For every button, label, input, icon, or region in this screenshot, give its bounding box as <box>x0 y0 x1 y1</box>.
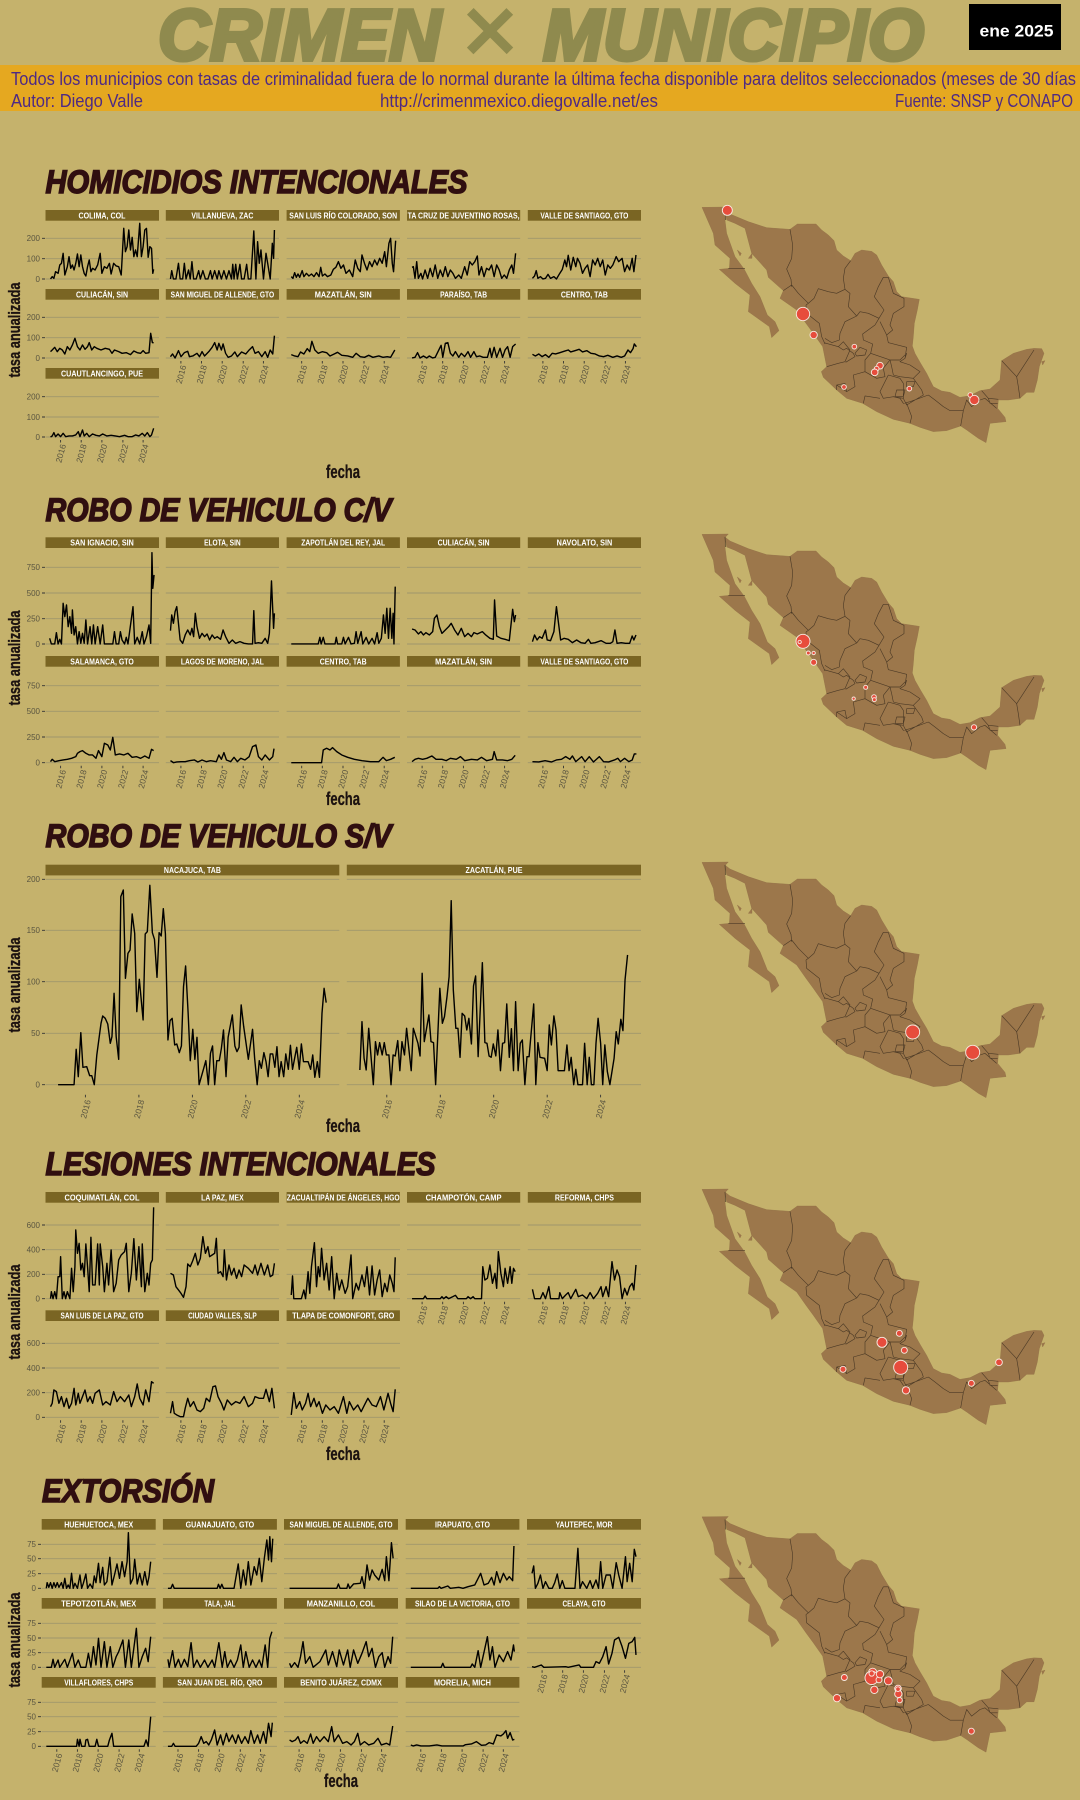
panel: Lagos de Moreno: 2022 <box>236 768 251 789</box>
panel: Centro: 2020 <box>336 768 350 789</box>
y ticks: 500 <box>27 707 41 716</box>
panel: Tlapa de Comonfort: 2024 <box>377 1423 392 1444</box>
y ticks: 25 <box>27 1570 37 1578</box>
panel: Zacualtipán de Ángeles: ZACUALTIPÁN DE ÁNGELES, HGO <box>287 1192 400 1202</box>
y ticks: 0 <box>36 354 41 363</box>
y ticks: 750 <box>27 682 41 690</box>
panel: Benito Juárez: 2018 <box>313 1752 327 1773</box>
panel: Villaflores: 2022 <box>112 1752 127 1773</box>
y ticks: 100 <box>27 413 41 422</box>
panel: Culiacán: CULIACÁN, SIN <box>438 538 490 548</box>
subtitle band: Autor: Diego Valle <box>11 91 143 111</box>
panel: Manzanillo <box>284 1598 398 1667</box>
panel: Centro: 2018 <box>556 364 571 385</box>
y ticks: 200 <box>27 1388 41 1398</box>
panel: Morelia: 2018 <box>434 1752 449 1773</box>
panel: San Juan del Río: SAN JUAN DEL RÍO, QRO <box>177 1677 263 1687</box>
panel: Mazatlán: 2024 <box>497 768 512 789</box>
y ticks <box>27 1221 45 1422</box>
section: robo de vehiculo c/v <box>5 492 1045 809</box>
y ticks: 100 <box>27 978 41 986</box>
panel: Navolato: NAVOLATO, SIN <box>557 538 612 548</box>
y ticks: 25 <box>27 1728 37 1736</box>
panel: Centro: CENTRO, TAB <box>561 289 608 299</box>
panel: Champotón: 2018 <box>436 1304 450 1325</box>
panel: Ciudad Valles: 2024 <box>256 1423 271 1444</box>
heading: EXTORSIÓN <box>42 1473 215 1509</box>
panel: Mazatlán: 2020 <box>336 364 350 385</box>
panel: Centro: 2022 <box>598 364 613 385</box>
panel: Navolato <box>528 537 641 644</box>
panel: Tepotzotlán: TEPOTZOTLÁN, MEX <box>61 1598 136 1608</box>
panel: San Miguel de Allende <box>284 1519 398 1588</box>
panel: Villaflores: 2016 <box>50 1752 64 1773</box>
panel: Paraíso: PARAÍSO, TAB <box>440 289 487 299</box>
y ticks: 0 <box>36 1413 41 1422</box>
panel: Mazatlán: 2018 <box>315 364 330 385</box>
panel: Paraíso: 2016 <box>415 364 430 385</box>
panel: Cuautlancingo: 2022 <box>116 443 130 464</box>
panel: Villaflores: 2024 <box>132 1752 147 1773</box>
panel: Centro: 2024 <box>618 364 633 385</box>
y ticks: 75 <box>27 1698 37 1707</box>
panel: Colima: COLIMA, COL <box>78 210 126 220</box>
panel: Reforma: 2022 <box>598 1304 613 1325</box>
y ticks: 0 <box>32 1584 37 1593</box>
panel: Santa Cruz de Juventino Rosas <box>407 210 520 279</box>
panel: San Ignacio <box>46 537 159 644</box>
y ticks: 750 <box>27 563 41 572</box>
panel: Zacatlán: ZACATLÁN, PUE <box>466 865 523 875</box>
y ticks <box>27 234 45 442</box>
y ticks: 400 <box>27 1246 41 1254</box>
panel: Reforma: REFORMA, CHPS <box>555 1192 614 1202</box>
panel: Ciudad Valles <box>166 1310 279 1444</box>
panel: Zacatlán <box>347 865 641 1119</box>
panel: Celaya: 2024 <box>617 1673 632 1694</box>
date badge <box>969 4 1061 50</box>
panel: San Luis de la Paz: 2024 <box>136 1423 151 1444</box>
y ticks: 0 <box>36 1294 41 1304</box>
panel: San Miguel de Allende: 2020 <box>215 364 230 385</box>
y ticks: 0 <box>36 275 41 284</box>
y ticks: 200 <box>27 1270 41 1279</box>
panel: Morelia: 2020 <box>455 1752 470 1773</box>
panel: Salamanca: 2018 <box>74 768 89 789</box>
panel: Silao de la Victoria <box>406 1598 519 1667</box>
panel: Salamanca: 2016 <box>53 768 68 789</box>
x axis title: fecha <box>326 1116 361 1136</box>
panel: Centro: CENTRO, TAB <box>320 656 367 666</box>
panel: Villanueva <box>166 210 279 279</box>
panel: San Luis de la Paz: 2022 <box>116 1423 130 1444</box>
panel: Santa Cruz de Juventino Rosas: TA CRUZ DE JUVENTINO ROSAS, <box>408 210 520 220</box>
y axis title: tasa anualizada <box>5 1264 24 1360</box>
panel: Culiacán <box>46 289 159 358</box>
panel: Centro <box>528 289 641 385</box>
panel: Benito Juárez: 2022 <box>354 1752 369 1773</box>
x axis title: fecha <box>326 462 361 482</box>
map: lesiones <box>702 1189 1045 1425</box>
panel: Morelia: 2024 <box>496 1752 511 1773</box>
panel: Nacajuca: 2022 <box>239 1098 253 1119</box>
panel: Valle de Santiago: 2024 <box>618 768 633 789</box>
y ticks: 25 <box>27 1648 37 1658</box>
panel: San Luis Río Colorado: SAN LUIS RÍO COLORADO, SON <box>289 210 397 220</box>
y ticks: 0 <box>36 758 41 768</box>
panel: Reforma: 2024 <box>618 1304 633 1325</box>
map: extorsión <box>702 1516 1045 1752</box>
panel: Benito Juárez: BENITO JUÁREZ, CDMX <box>300 1677 382 1687</box>
panel: Villaflores: VILLAFLORES, CHPS <box>64 1677 133 1687</box>
panel: Valle de Santiago: 2020 <box>577 768 592 789</box>
panel: Cuautlancingo: 2024 <box>136 443 151 464</box>
panel: Nacajuca <box>46 865 339 1119</box>
panel: Benito Juárez: 2024 <box>374 1752 389 1773</box>
panel: San Miguel de Allende: SAN MIGUEL DE ALLENDE, GTO <box>171 289 274 299</box>
panel: Morelia <box>406 1677 519 1773</box>
panel: Villaflores: 2020 <box>91 1752 106 1773</box>
panel: Morelia: 2016 <box>414 1752 428 1773</box>
panel: Coquimatlán <box>46 1192 159 1299</box>
y axis title: tasa anualizada <box>5 1592 24 1688</box>
section: robo de vehiculo s/v <box>5 818 1045 1136</box>
y axis title: tasa anualizada <box>5 937 24 1032</box>
y ticks: 400 <box>27 1364 41 1373</box>
panel: Zacatlán: 2018 <box>433 1098 448 1119</box>
y ticks <box>27 1540 41 1751</box>
y ticks: 250 <box>27 614 41 624</box>
panel: San Miguel de Allende <box>166 289 279 385</box>
panel: San Juan del Río: 2018 <box>191 1752 206 1773</box>
panel: San Miguel de Allende: SAN MIGUEL DE ALLENDE, GTO <box>290 1519 393 1529</box>
panel: Ciudad Valles: 2022 <box>236 1423 251 1444</box>
panel: Paraíso: 2024 <box>497 364 512 385</box>
panel: Champotón: CHAMPOTÓN, CAMP <box>426 1191 502 1202</box>
y ticks: 75 <box>27 1540 37 1549</box>
panel: Reforma: 2020 <box>577 1304 592 1325</box>
panel: Celaya: 2018 <box>556 1673 570 1694</box>
panel: Manzanillo: MANZANILLO, COL <box>307 1598 375 1608</box>
panel: Valle de Santiago: VALLE DE SANTIAGO, GTO <box>540 656 629 666</box>
panel: Nacajuca: 2020 <box>185 1098 200 1119</box>
panel: San Luis de la Paz: 2018 <box>74 1423 89 1444</box>
x axis title: fecha <box>324 1771 359 1791</box>
panel: Mazatlán: 2024 <box>377 364 392 385</box>
date badge: ene 2025 <box>980 22 1054 40</box>
heading: ROBO DE VEHICULO S/V <box>46 818 394 854</box>
panel: Mazatlán <box>407 656 520 789</box>
panel: Paraíso: 2018 <box>436 364 450 385</box>
panel: Lagos de Moreno: 2018 <box>194 768 209 789</box>
panel: Zacatlán: 2016 <box>380 1098 394 1119</box>
panel: Nacajuca: NACAJUCA, TAB <box>164 865 221 875</box>
panel: Salamanca <box>46 656 159 789</box>
panel: Zacatlán: 2020 <box>487 1098 501 1119</box>
panel: Tala: TALA, JAL <box>204 1598 235 1608</box>
panel: Mazatlán: MAZATLÁN, SIN <box>435 656 492 666</box>
panel: Guanajuato <box>163 1519 277 1588</box>
panel: Silao de la Victoria: SILAO DE LA VICTORIA, GTO <box>415 1598 510 1608</box>
y ticks: 600 <box>27 1221 41 1230</box>
panel: Cuautlancingo: 2020 <box>95 443 109 464</box>
panel: Villanueva: VILLANUEVA, ZAC <box>191 210 253 220</box>
panel: Salamanca: 2020 <box>95 768 109 789</box>
y ticks: 0 <box>32 1663 37 1672</box>
panel: Zacualtipán de Ángeles <box>287 1192 400 1299</box>
y ticks: 250 <box>27 733 41 742</box>
y ticks: 100 <box>27 334 41 342</box>
panel: Zapotlán del Rey <box>287 537 400 644</box>
panel: Zacatlán: 2022 <box>540 1098 555 1119</box>
panel: Lagos de Moreno: 2020 <box>215 768 230 789</box>
y ticks: 200 <box>27 313 41 322</box>
y ticks: 0 <box>36 1080 41 1090</box>
panel: Tala <box>163 1598 277 1667</box>
heading: HOMICIDIOS INTENCIONALES <box>46 164 468 200</box>
panel: Reforma: 2016 <box>536 1304 550 1325</box>
panel: Valle de Santiago: 2016 <box>536 768 550 789</box>
panel: Mazatlán: 2016 <box>415 768 430 789</box>
section: lesiones intencionales <box>5 1146 1045 1464</box>
panel: Ciudad Valles: 2020 <box>215 1423 230 1444</box>
panel: Nacajuca: 2018 <box>132 1098 146 1119</box>
panel: Champotón: 2020 <box>456 1304 471 1325</box>
panel: San Luis de la Paz: 2020 <box>95 1423 109 1444</box>
panel: Valle de Santiago: 2022 <box>598 768 613 789</box>
panel: San Luis de la Paz <box>46 1310 159 1444</box>
panel: Elota <box>166 537 279 644</box>
panel: San Miguel de Allende: 2024 <box>256 364 271 385</box>
panel: Centro: 2018 <box>315 768 330 789</box>
panel: Cuautlancingo <box>46 368 159 464</box>
panel: Ciudad Valles: CIUDAD VALLES, SLP <box>188 1311 257 1321</box>
panel: Lagos de Moreno: 2024 <box>256 768 271 789</box>
panel: Valle de Santiago <box>528 656 641 789</box>
panel: Paraíso: 2020 <box>456 364 471 385</box>
panel: San Juan del Río: 2020 <box>212 1752 227 1773</box>
panel: Nacajuca: 2024 <box>292 1098 307 1119</box>
panel: Nacajuca: 2016 <box>78 1098 93 1119</box>
panel: San Miguel de Allende: 2016 <box>174 364 188 385</box>
panel: Villaflores: 2018 <box>70 1752 85 1773</box>
y ticks: 50 <box>27 1712 37 1722</box>
subtitle band: http://crimenmexico.diegovalle.net/es <box>380 91 658 111</box>
panel: Tlapa de Comonfort: 2016 <box>295 1423 309 1444</box>
panel: Cuautlancingo: CUAUTLANCINGO, PUE <box>61 368 143 378</box>
panel: San Miguel de Allende: 2018 <box>194 364 209 385</box>
panel: Zapotlán del Rey: ZAPOTLÁN DEL REY, JAL <box>301 538 385 548</box>
panel: La Paz <box>166 1192 279 1299</box>
panel: Champotón: 2024 <box>497 1304 512 1325</box>
y ticks: 0 <box>36 433 41 442</box>
panel: Mazatlán: 2016 <box>295 364 309 385</box>
y ticks: 100 <box>27 254 41 264</box>
panel: Elota: ELOTA, SIN <box>204 538 241 548</box>
panel: Valle de Santiago <box>528 210 641 279</box>
panel: Irapuato: IRAPUATO, GTO <box>435 1519 490 1529</box>
panel: Celaya: 2016 <box>535 1673 550 1694</box>
panel: Guanajuato: GUANAJUATO, GTO <box>186 1519 255 1529</box>
panel: La Paz: LA PAZ, MEX <box>201 1192 244 1202</box>
panel: Mazatlán: 2022 <box>357 364 371 385</box>
y ticks: 200 <box>27 234 41 243</box>
panel: San Luis Río Colorado <box>287 210 400 279</box>
y ticks <box>27 563 45 768</box>
y ticks: 200 <box>27 392 41 402</box>
panel: Morelia: 2022 <box>476 1752 491 1773</box>
panel: Ciudad Valles: 2016 <box>174 1423 188 1444</box>
y axis title: tasa anualizada <box>5 282 24 378</box>
panel: Mazatlán <box>287 289 400 385</box>
panel: Reforma: 2018 <box>556 1304 571 1325</box>
heading: LESIONES INTENCIONALES <box>46 1146 436 1182</box>
heading: ROBO DE VEHICULO C/V <box>46 492 394 528</box>
panel: Tlapa de Comonfort: 2020 <box>336 1423 350 1444</box>
panel: Centro: 2022 <box>357 768 371 789</box>
panel: Salamanca: SALAMANCA, GTO <box>70 656 134 666</box>
section: homicidios intencionales <box>5 164 1045 482</box>
panel: Lagos de Moreno: 2016 <box>174 768 188 789</box>
panel: Tlapa de Comonfort: 2022 <box>357 1423 371 1444</box>
map: homicidios <box>702 205 1045 443</box>
panel: Reforma <box>528 1192 641 1325</box>
panel: Salamanca: 2022 <box>116 768 130 789</box>
panel: Huehuetoca: HUEHUETOCA, MEX <box>64 1519 133 1529</box>
panel: Celaya: CELAYA, GTO <box>562 1598 606 1608</box>
panel: Paraíso: 2022 <box>477 364 492 385</box>
panel: Centro: 2024 <box>377 768 392 789</box>
panel: Valle de Santiago: VALLE DE SANTIAGO, GTO <box>540 210 629 220</box>
y axis title: tasa anualizada <box>5 610 24 706</box>
panel: Culiacán <box>407 537 520 644</box>
panel: Cuautlancingo: 2016 <box>53 443 68 464</box>
panel: Irapuato <box>406 1519 519 1588</box>
panel: Valle de Santiago: 2018 <box>556 768 571 789</box>
panel: Lagos de Moreno: LAGOS DE MORENO, JAL <box>181 656 264 666</box>
panel: Huehuetoca <box>42 1519 156 1588</box>
panel: Tlapa de Comonfort: 2018 <box>315 1423 330 1444</box>
panel: Cuautlancingo: 2018 <box>74 443 89 464</box>
panel: Tepotzotlán <box>42 1598 156 1667</box>
panel: Colima <box>46 210 159 279</box>
panel: Villaflores <box>42 1677 156 1773</box>
panel: Benito Juárez: 2020 <box>333 1752 348 1773</box>
y ticks: 0 <box>36 640 41 649</box>
map: robo c/v <box>702 534 1045 770</box>
panel: Mazatlán: 2020 <box>456 768 471 789</box>
panel: San Juan del Río: 2022 <box>233 1752 248 1773</box>
panel: Celaya: 2020 <box>576 1673 591 1694</box>
panel: Champotón: 2016 <box>415 1304 430 1325</box>
x axis title: fecha <box>326 1444 361 1464</box>
panel: Celaya <box>527 1598 641 1694</box>
panel: San Juan del Río: 2024 <box>253 1752 268 1773</box>
y ticks: 0 <box>32 1742 37 1751</box>
y ticks: 150 <box>27 926 41 935</box>
panel: San Juan del Río <box>163 1677 277 1773</box>
y ticks: 500 <box>27 589 41 598</box>
panel: Centro <box>287 656 400 789</box>
panel: Yautepec: YAUTEPEC, MOR <box>556 1519 612 1529</box>
x axis title: fecha <box>326 789 361 809</box>
panel: Coquimatlán: COQUIMATLÁN, COL <box>64 1192 140 1202</box>
panel: Centro: 2020 <box>577 364 592 385</box>
panel: Mazatlán: 2018 <box>436 768 450 789</box>
y ticks: 50 <box>27 1634 37 1643</box>
panel: San Miguel de Allende: 2022 <box>236 364 251 385</box>
panel: Tlapa de Comonfort <box>287 1310 400 1444</box>
panel: San Ignacio: SAN IGNACIO, SIN <box>70 538 134 548</box>
panel: Champotón <box>407 1191 520 1325</box>
panel: Morelia: MORELIA, MICH <box>434 1677 491 1687</box>
section: extorsión <box>5 1473 1045 1791</box>
y ticks: 50 <box>31 1029 41 1038</box>
y ticks: 200 <box>27 875 41 884</box>
main title <box>158 0 924 84</box>
y ticks: 600 <box>27 1339 41 1348</box>
panel: Mazatlán: 2022 <box>477 768 492 789</box>
panel: Champotón: 2022 <box>477 1304 492 1325</box>
map: robo s/v <box>702 862 1045 1098</box>
panel: Centro: 2016 <box>536 364 550 385</box>
panel: San Luis de la Paz: SAN LUIS DE LA PAZ, GTO <box>60 1311 144 1321</box>
panel: Ciudad Valles: 2018 <box>194 1423 209 1444</box>
panel: Culiacán: CULIACÁN, SIN <box>76 289 128 299</box>
y ticks <box>27 875 45 1090</box>
subtitle band <box>0 65 1080 111</box>
panel: Tlapa de Comonfort: TLAPA DE COMONFORT, GRO <box>292 1311 395 1321</box>
panel: Lagos de Moreno <box>166 656 279 789</box>
y ticks: 75 <box>27 1619 37 1628</box>
panel: Benito Juárez: 2016 <box>292 1752 307 1773</box>
y ticks: 50 <box>27 1554 37 1564</box>
panel: Salamanca: 2024 <box>136 768 151 789</box>
panel: San Juan del Río: 2016 <box>171 1752 185 1773</box>
panel: San Luis de la Paz: 2016 <box>53 1423 68 1444</box>
panel: Benito Juárez <box>284 1677 398 1773</box>
panel: Paraíso <box>407 289 520 385</box>
panel: Yautepec <box>527 1519 641 1588</box>
panel: Mazatlán: MAZATLÁN, SIN <box>315 289 372 299</box>
panel: Centro: 2016 <box>295 768 309 789</box>
panel: Zacatlán: 2024 <box>593 1098 608 1119</box>
panel: Celaya: 2022 <box>597 1673 612 1694</box>
